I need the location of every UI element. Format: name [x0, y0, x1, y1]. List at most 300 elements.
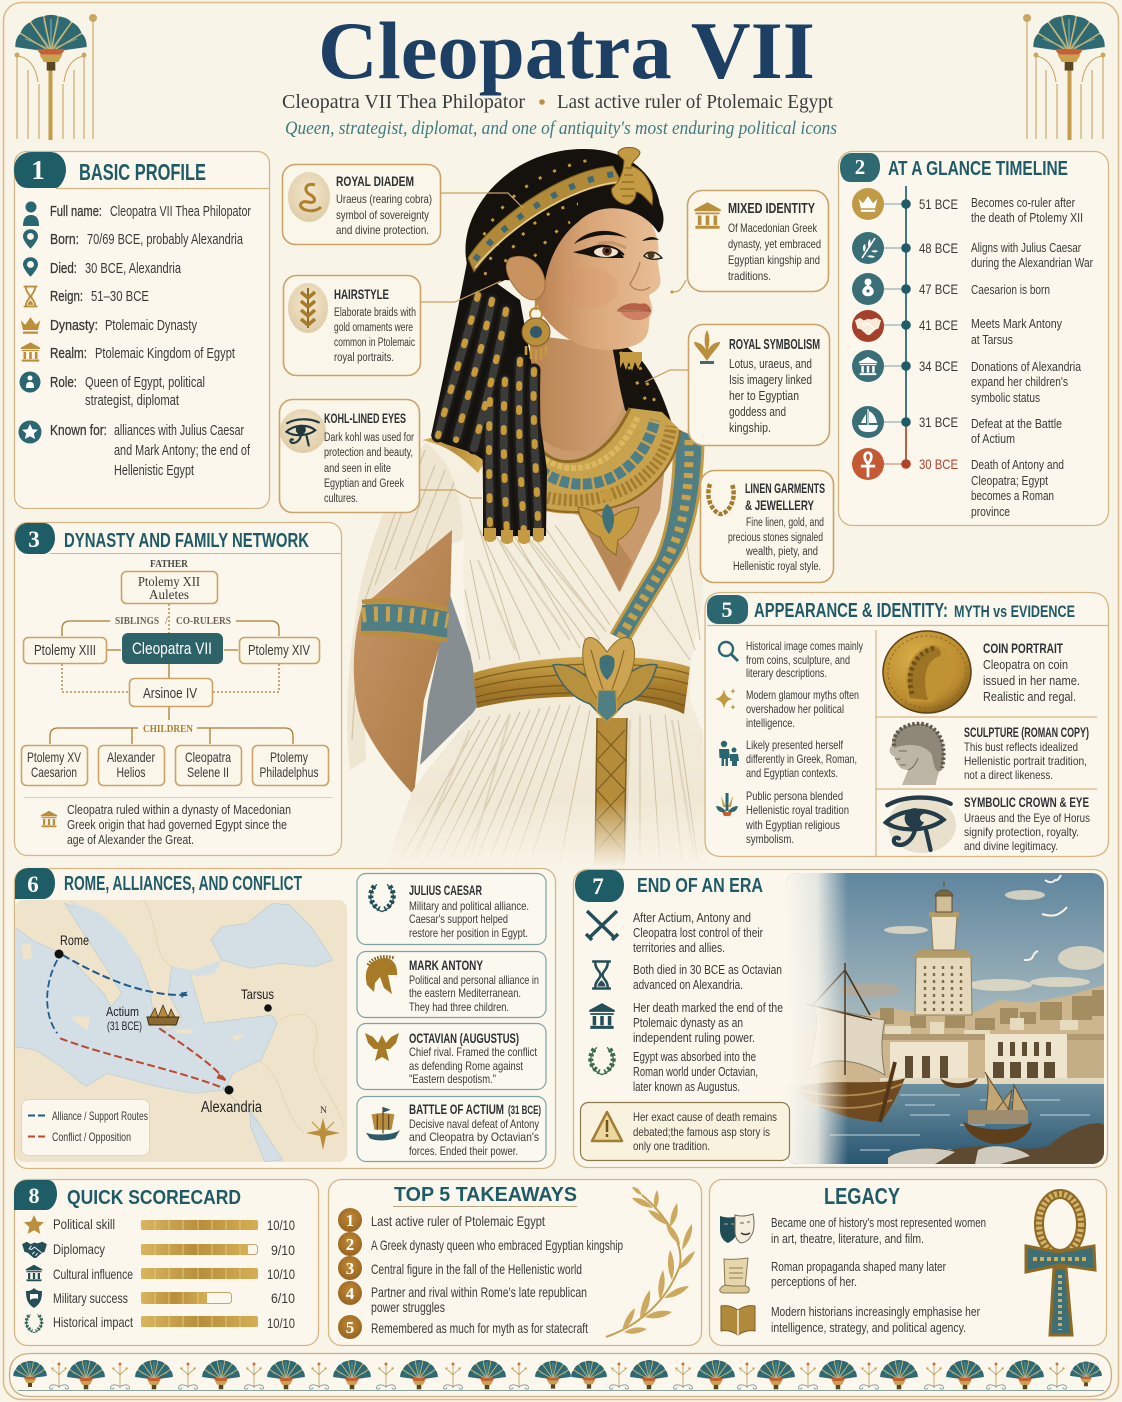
section number badge 2: 2 — [855, 155, 865, 179]
chest skin — [528, 355, 668, 592]
borders — [143, 900, 343, 1133]
card: Mark Antony: They had three children. — [409, 1000, 509, 1014]
event 34 BCE — [852, 350, 1082, 405]
box: Cleopatra VII — [122, 633, 223, 664]
point: presented differently: and Egyptian contexts. — [746, 766, 838, 780]
takeaway 1 — [338, 1208, 545, 1232]
card: Battle of Actium: (31 BCE) — [508, 1103, 541, 1117]
card: Mark Antony: MARK ANTONY — [409, 957, 483, 973]
card: Battle of Actium: BATTLE OF ACTIUM — [409, 1101, 504, 1117]
wide collar necklace — [536, 408, 680, 514]
eyebrows — [574, 231, 659, 244]
rocks — [920, 1123, 1104, 1164]
child: Ptolemy Philadelphus — [252, 746, 328, 786]
callout: hairstyle: Elaborate braids with — [334, 307, 416, 319]
callout: royal diadem: symbol of sovereignty — [336, 208, 429, 222]
city: Actium: (31 BCE) — [107, 1019, 142, 1033]
point: public persona: symbolism. — [746, 832, 794, 846]
event 30 BCE: Death of Antony and — [971, 457, 1064, 472]
point: actium: After Actium, Antony and — [633, 910, 751, 925]
child: Ptolemy XV Caesarion: Ptolemy XV — [27, 749, 81, 765]
row: role: strategist, diplomat — [85, 393, 179, 409]
uraeus cobra — [612, 148, 653, 205]
label: children: CHILDREN — [143, 724, 193, 735]
row: diplomacy: Diplomacy — [53, 1241, 105, 1257]
point: historical image: Historical image comes mainly — [746, 639, 863, 653]
coin text: issued in her name. — [983, 673, 1080, 688]
point: absorbed: Egypt was absorbed into the — [633, 1049, 756, 1064]
heading: ROME, ALLIANCES, AND CONFLICT — [64, 873, 302, 895]
row: died: Died: — [50, 260, 77, 277]
takeaway 2: 2 — [346, 1235, 354, 1254]
point: public persona: with Egyptian religious — [745, 818, 840, 832]
takeaway 4: Partner and rival within Rome's late republican — [371, 1284, 587, 1300]
row: political skill: 10/10 — [267, 1217, 295, 1233]
child: Ptolemy XV Caesarion — [22, 746, 88, 786]
big ship — [797, 963, 905, 1122]
row: full name: Full name: — [50, 203, 102, 220]
mediterranean sea — [14, 903, 277, 1093]
row: reign — [24, 287, 149, 306]
section number badge 6: 6 — [27, 872, 39, 897]
label: siblings and co-rulers: / — [165, 616, 168, 627]
mid boat — [940, 1078, 978, 1088]
heading: AT A GLANCE TIMELINE — [888, 158, 1068, 180]
event 47 BCE: 47 BCE — [919, 281, 958, 297]
earring — [522, 300, 550, 361]
point: glamour myths — [715, 688, 859, 730]
heading: END OF AN ERA — [637, 875, 763, 897]
back hair right — [608, 340, 672, 428]
heading: LEGACY — [824, 1183, 900, 1209]
panel 3: dynasty and family network — [14, 522, 342, 856]
lighthouse — [912, 882, 973, 1015]
panel 5: appearance and identity — [705, 592, 1108, 856]
point: glamour myths: intelligence. — [746, 716, 795, 730]
dynasty note: Greek origin that had governed Egypt since the — [67, 817, 287, 832]
water — [786, 1084, 1104, 1164]
callout: mixed identity: traditions. — [728, 269, 771, 283]
row: political skill: Political skill — [53, 1216, 115, 1232]
takeaway 5: Remembered as much for myth as for statecraft — [371, 1320, 588, 1336]
map — [14, 900, 347, 1162]
row: realm: Realm: — [50, 345, 87, 362]
row: cultural influence: Cultural influence — [53, 1266, 133, 1282]
box: Ptolemy XII Auletes — [122, 572, 218, 604]
decorative palmette: left — [14, 14, 97, 140]
city: Alexandria: Alexandria — [201, 1099, 262, 1116]
callout: hairstyle: gold ornaments were — [334, 322, 413, 334]
text — [771, 1304, 981, 1335]
heading: APPEARANCE & IDENTITY: — [754, 600, 948, 622]
icon: ship at Actium — [147, 1005, 179, 1025]
row: diplomacy: 9/10 — [271, 1242, 295, 1258]
takeaway 4: power struggles — [371, 1299, 445, 1315]
box: Cleopatra VII: Cleopatra VII — [132, 640, 212, 658]
symbolic eye of Horus — [886, 797, 956, 853]
row: full name: Cleopatra VII Thea Philopator — [110, 204, 251, 220]
icon: braid — [288, 283, 328, 333]
subtitle: Last active ruler of Ptolemaic Egypt — [557, 91, 833, 113]
callout: royal diadem — [282, 164, 440, 244]
city: Rome: Rome — [60, 932, 89, 948]
event 31 BCE: Defeat at the Battle — [971, 416, 1062, 431]
card: Battle of Actium: and Cleopatra by Octavian's — [409, 1130, 539, 1144]
row: realm: Ptolemaic Kingdom of Egypt — [95, 346, 235, 362]
symbolic text: and divine legitimacy. — [964, 839, 1058, 853]
point: historical image — [719, 639, 863, 680]
card: Octavian: Chief rival. Framed the conflict — [409, 1045, 538, 1059]
symbolic text — [964, 795, 1090, 853]
row: military success — [26, 1288, 295, 1308]
warning callout: Her exact cause of death remains — [633, 1110, 777, 1124]
child: Cleopatra Selene II: Cleopatra — [185, 749, 231, 765]
callout: linen garments — [700, 470, 834, 582]
coin portrait — [883, 631, 971, 713]
face — [532, 203, 660, 350]
alliance route — [63, 955, 188, 995]
point: actium — [586, 910, 764, 955]
event 34 BCE: 34 BCE — [919, 358, 958, 374]
callout: linen garments: & JEWELLERY — [745, 497, 814, 513]
islands — [21, 943, 245, 1042]
section number badge 5: 5 — [722, 597, 732, 622]
callout: royal symbolism: kingship. — [729, 420, 771, 435]
dynasty note: Cleopatra ruled within a dynasty of Macedonian — [67, 802, 291, 817]
icon: necklace — [708, 484, 734, 514]
panel 8: quick scorecard — [14, 1180, 318, 1346]
child: Cleopatra Selene II: Selene II — [187, 764, 229, 780]
child: Ptolemy Philadelphus: Philadelphus — [260, 764, 318, 780]
city: Actium: Actium — [106, 1004, 139, 1019]
callout: mixed identity — [688, 190, 828, 292]
cape folds — [352, 450, 455, 740]
belt buckle — [553, 637, 657, 722]
neck — [530, 335, 623, 451]
point: presented differently — [719, 738, 857, 780]
compass: N — [320, 1106, 327, 1116]
coin text: Cleopatra on coin — [983, 657, 1068, 672]
row: born: 70/69 BCE, probably Alexandria — [87, 232, 244, 248]
city: Tarsus — [241, 990, 274, 1012]
city: Tarsus: Tarsus — [241, 986, 274, 1002]
point: glamour myths: Modern glamour myths often — [746, 688, 859, 702]
right earring — [620, 352, 642, 371]
point: dynasty end — [589, 1000, 783, 1045]
cape left — [347, 438, 480, 770]
text: Roman propaganda shaped many later — [771, 1259, 947, 1274]
section number badge 8: 8 — [28, 1183, 40, 1208]
event 34 BCE: Donations of Alexandria — [971, 359, 1082, 374]
text: intelligence, strategy, and political agency. — [771, 1320, 966, 1335]
event 30 BCE: province — [971, 504, 1010, 519]
harbour painting — [786, 873, 1106, 1164]
box: Ptolemy XIII: Ptolemy XIII — [34, 642, 96, 659]
card: Octavian — [357, 1024, 546, 1090]
gulls — [1024, 875, 1067, 960]
symbolic text: signify protection, royalty. — [964, 825, 1079, 839]
connector lines from callouts — [419, 193, 688, 498]
icon: lotus — [694, 330, 720, 364]
family tree connectors — [50, 604, 293, 744]
coin text — [983, 640, 1080, 704]
callout: kohl-lined eyes: and seen in elite — [324, 463, 391, 475]
card: Julius Caesar: JULIUS CAESAR — [409, 882, 482, 898]
row: historical impact: 10/10 — [267, 1315, 295, 1331]
point: historical image: from coins, sculpture, and — [746, 653, 850, 667]
row: diplomacy — [22, 1241, 295, 1258]
point: presented differently: Likely presented herself — [746, 738, 844, 752]
panel 7: end of an era — [574, 870, 1108, 1168]
map legend: Alliance / Support Routes — [52, 1109, 148, 1123]
callout: mixed identity: Of Macedonian Greek — [728, 221, 818, 235]
ear — [506, 256, 545, 300]
card: Octavian: "Eastern despotism." — [409, 1072, 496, 1086]
card: Battle of Actium: Decisive naval defeat of Antony — [409, 1117, 539, 1131]
row: born: Born: — [50, 231, 79, 248]
warning callout: only one tradition. — [633, 1139, 710, 1153]
text: Became one of history's most represented women — [771, 1215, 986, 1230]
decorative palmette: right — [1023, 14, 1106, 140]
callout: royal diadem: and divine protection. — [336, 223, 429, 237]
section number badge 3 — [15, 523, 55, 554]
callout: hairstyle: HAIRSTYLE — [334, 286, 389, 302]
warning callout: debated;the famous asp story is — [633, 1125, 770, 1139]
takeaway 4 — [338, 1281, 587, 1315]
point: actium: territories and allies. — [633, 940, 725, 955]
heading: MYTH vs EVIDENCE — [954, 602, 1075, 621]
point: absorbed: Roman world under Octavian, — [633, 1064, 758, 1079]
takeaway 5: 5 — [346, 1318, 354, 1337]
icon: temple — [694, 202, 721, 229]
row: realm — [21, 342, 235, 362]
takeaway 1: 1 — [346, 1211, 354, 1230]
row: reign: Reign: — [50, 288, 83, 305]
callout: linen garments: Fine linen, gold, and — [746, 517, 824, 529]
coin text: Realistic and regal. — [983, 689, 1076, 704]
compass — [306, 1106, 340, 1150]
row: reign: 51–30 BCE — [91, 289, 149, 305]
section number badge 7: 7 — [592, 874, 604, 899]
row: role: Role: — [50, 374, 77, 391]
callout: royal symbolism — [688, 324, 830, 446]
point: presented differently: differently in Greek, Roman, — [746, 752, 857, 766]
row: known for: and Mark Antony; the end of — [114, 443, 251, 459]
section number badge 2 — [840, 153, 880, 182]
arm band — [361, 600, 448, 640]
card: Julius Caesar: Caesar's support helped — [409, 912, 508, 926]
point: historical image: literary descriptions. — [746, 666, 827, 680]
label: siblings and co-rulers: SIBLINGS — [115, 616, 159, 627]
text: perceptions of her. — [771, 1274, 857, 1289]
sash — [611, 428, 703, 642]
arm — [354, 530, 452, 795]
text — [771, 1259, 947, 1289]
box: Ptolemy XIV: Ptolemy XIV — [248, 642, 310, 659]
box: Ptolemy XII Auletes: Ptolemy XII — [138, 574, 200, 589]
takeaway 4: 4 — [346, 1284, 355, 1303]
box: Ptolemy XIII — [24, 638, 106, 664]
row: role — [20, 372, 205, 409]
section number badge 5 — [707, 595, 748, 624]
city — [819, 985, 1104, 1083]
scarab pendant — [578, 489, 639, 555]
child: Cleopatra Selene II — [176, 746, 242, 786]
card: Mark Antony — [357, 952, 546, 1018]
point: public persona: Public persona blended — [746, 789, 843, 803]
child: Alexander Helios — [98, 746, 164, 786]
event 41 BCE: Meets Mark Antony — [971, 316, 1062, 331]
subtitle — [282, 91, 833, 113]
city: Rome — [54, 936, 89, 958]
event 51 BCE: 51 BCE — [919, 196, 958, 212]
callout: royal symbolism: goddess and — [729, 404, 786, 419]
hanging sash — [595, 718, 627, 868]
takeaway 3: Central figure in the fall of the Hellenistic world — [371, 1261, 582, 1277]
nose and lips — [617, 262, 651, 320]
takeaway 5 — [338, 1315, 588, 1339]
point: dynasty end: Ptolemaic dynasty as an — [633, 1015, 743, 1030]
callout: kohl-lined eyes: protection and beauty, — [324, 447, 413, 459]
shoulder collar — [422, 428, 484, 473]
row: cultural influence: 10/10 — [267, 1266, 295, 1282]
callout: hairstyle — [284, 276, 420, 376]
sculpture text: This bust reflects idealized — [964, 740, 1078, 754]
takeaway 2: A Greek dynasty queen who embraced Egyptian kingship — [371, 1237, 623, 1253]
card: Mark Antony: Political and personal alliance in — [409, 973, 539, 987]
icon: eye — [280, 409, 326, 453]
row: known for: Known for: — [50, 422, 107, 439]
label: siblings and co-rulers — [115, 616, 231, 627]
card: Octavian: as defending Rome against — [409, 1059, 524, 1073]
point: absorbed: later known as Augustus. — [633, 1079, 740, 1094]
point: hourglass — [592, 961, 782, 992]
takeaway 2 — [338, 1232, 623, 1256]
callout: royal diadem: ROYAL DIADEM — [336, 173, 414, 189]
tagline: Queen, strategist, diplomat, and one of antiquity's most enduring political icons — [285, 118, 837, 139]
callout: kohl-lined eyes: Egyptian and Greek — [324, 478, 404, 490]
event 41 BCE — [852, 310, 1062, 347]
row: born — [23, 229, 244, 249]
box: Ptolemy XII Auletes: Auletes — [149, 587, 189, 602]
icon: open book — [721, 1306, 755, 1335]
callout: mixed identity: dynasty, yet embraced — [728, 237, 821, 251]
event 30 BCE: 30 BCE — [919, 456, 958, 472]
event 48 BCE: 48 BCE — [919, 240, 958, 256]
sculpture text: not a direct likeness. — [964, 768, 1053, 782]
panel 6: rome alliances and conflict — [14, 868, 555, 1168]
warning callout — [580, 1102, 790, 1160]
callout: royal symbolism: ROYAL SYMBOLISM — [729, 337, 820, 353]
sculpture bust — [890, 724, 944, 785]
cheek blush — [562, 268, 618, 308]
callout: linen garments: Hellenistic royal style. — [733, 561, 821, 573]
card: Julius Caesar: Military and political alliance. — [409, 899, 529, 913]
label: siblings and co-rulers: CO-RULERS — [176, 616, 231, 627]
panel: legacy — [710, 1180, 1106, 1346]
central portrait of Cleopatra — [345, 148, 710, 868]
child: Alexander Helios: Helios — [116, 764, 146, 780]
event 47 BCE: Caesarion is born — [971, 282, 1050, 297]
event 48 BCE — [852, 232, 1094, 270]
text — [771, 1215, 986, 1246]
event 51 BCE — [852, 188, 1083, 225]
hair top and fringe — [465, 149, 663, 292]
heading: QUICK SCORECARD — [67, 1187, 241, 1209]
subtitle: Cleopatra VII Thea Philopator — [282, 91, 525, 113]
eyes — [573, 242, 662, 259]
harbour buildings — [890, 1034, 1067, 1078]
nile and red sea — [229, 1093, 283, 1162]
callout: mixed identity: MIXED IDENTITY — [728, 201, 815, 217]
box: Arsinoe IV — [130, 678, 212, 706]
aegean connection — [172, 960, 222, 977]
dynasty note — [67, 802, 291, 847]
card: Battle of Actium — [357, 1096, 546, 1162]
callout: royal symbolism: Lotus, uraeus, and — [729, 356, 812, 371]
dress — [385, 430, 707, 868]
section number badge 6 — [15, 868, 55, 899]
row: military success: Military success — [53, 1290, 128, 1306]
event 51 BCE: the death of Ptolemy XII — [971, 210, 1083, 225]
point: hourglass: Both died in 30 BCE as Octavian — [633, 962, 782, 977]
title: Cleopatra VII — [318, 5, 815, 96]
event 34 BCE: symbolic status — [971, 390, 1040, 405]
child: Ptolemy XV Caesarion: Caesarion — [31, 764, 77, 780]
event 31 BCE: 31 BCE — [919, 414, 958, 430]
small boat — [963, 1072, 1032, 1144]
heading: BASIC PROFILE — [79, 159, 206, 185]
back hair mass and left braids — [431, 262, 547, 544]
symbolic text: Uraeus and the Eye of Horus — [964, 811, 1090, 825]
timeline spine — [883, 186, 911, 469]
row: historical impact: Historical impact — [53, 1314, 133, 1330]
point: public persona: Hellenistic royal tradition — [746, 803, 849, 817]
footer frieze — [10, 1354, 1112, 1396]
panel 2: at a glance timeline — [838, 152, 1108, 526]
row: known for — [18, 420, 251, 479]
callout: royal diadem: Uraeus (rearing cobra) — [336, 192, 432, 206]
takeaway 1: Last active ruler of Ptolemaic Egypt — [371, 1213, 545, 1229]
row: died — [23, 257, 182, 277]
event 48 BCE: Aligns with Julius Caesar — [971, 240, 1082, 255]
row: political skill — [24, 1215, 295, 1234]
icon: scroll — [720, 1258, 749, 1293]
point: glamour myths: overshadow her political — [746, 702, 844, 716]
diadem band — [468, 166, 622, 272]
icon: theatre masks — [720, 1214, 754, 1243]
callout: kohl-lined eyes: KOHL-LINED EYES — [324, 410, 406, 426]
icon: temple — [41, 811, 57, 827]
sculpture text — [964, 725, 1089, 782]
city: Actium — [106, 1006, 142, 1032]
point: hourglass: advanced on Alexandria. — [633, 977, 743, 992]
point: absorbed — [591, 1047, 758, 1094]
panel: top 5 takeaways — [328, 1180, 702, 1346]
card: Julius Caesar: restore her position in Egypt. — [409, 926, 528, 940]
child: Alexander Helios: Alexander — [107, 749, 155, 765]
row: full name — [23, 202, 251, 226]
adriatic — [68, 900, 143, 967]
row: known for: alliances with Julius Caesar — [114, 423, 244, 439]
text: in art, theatre, literature, and film. — [771, 1231, 924, 1246]
row: dynasty: Ptolemaic Dynasty — [105, 318, 198, 334]
card: Julius Caesar — [357, 874, 546, 944]
card: Battle of Actium: forces. Ended their power. — [409, 1144, 518, 1158]
belt — [473, 657, 690, 714]
callout: kohl-lined eyes: Dark kohl was used for — [324, 432, 414, 444]
callout: linen garments: wealth, piety, and — [745, 546, 818, 558]
